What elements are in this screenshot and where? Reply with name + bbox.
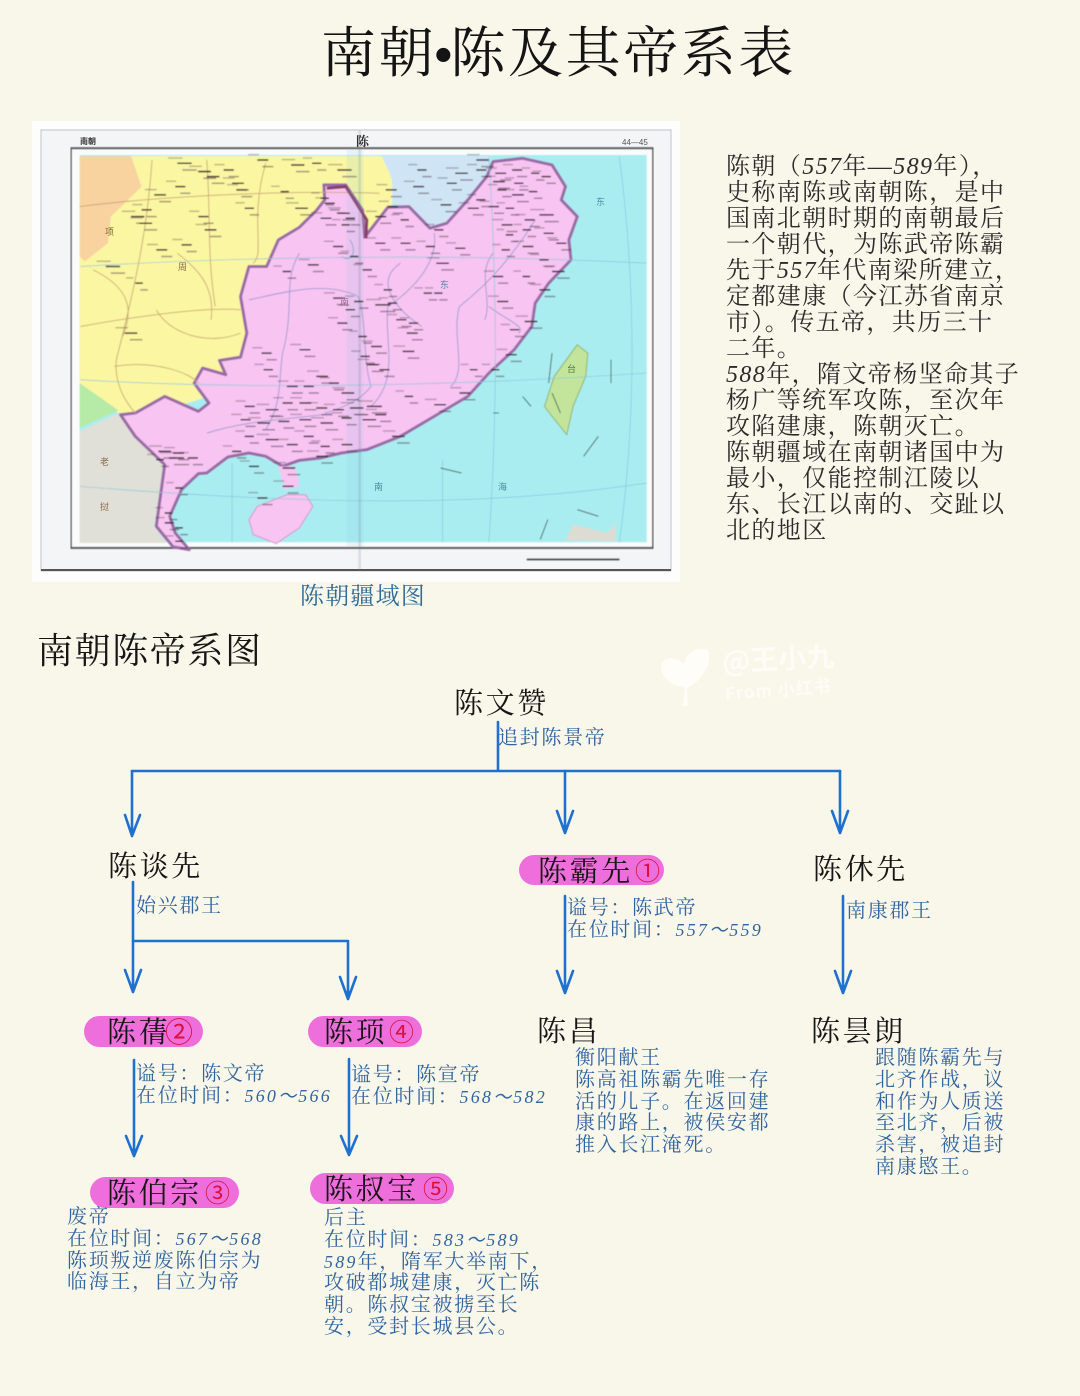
note: 陈文赞: 追封陈景帝 xyxy=(498,727,606,749)
note: 陈叔宝: 安，受封长城县公。 xyxy=(324,1316,519,1338)
map region names: 海 xyxy=(498,480,507,493)
title: 南朝•陈及其帝系表 xyxy=(321,23,796,84)
note: 陈叔宝: 在位时间：583～589 xyxy=(324,1229,520,1251)
map region: Northern Zhou xyxy=(80,156,393,413)
note: 陈伯宗: 废帝 xyxy=(67,1206,110,1228)
arrow: to 陈霸先 xyxy=(557,771,573,833)
note: 陈霸先: 谥号：陈武帝 xyxy=(567,897,697,919)
text block: dynasty introduction: 国南北朝时期的南朝最后 xyxy=(726,206,1005,232)
text block: dynasty introduction: 攻陷建康，陈朝灭亡。 xyxy=(726,414,980,440)
map region: Chen territory xyxy=(121,158,577,550)
map artwork xyxy=(71,130,653,571)
person pill: 陈伯宗: ③ xyxy=(205,1174,233,1210)
section heading: 南朝陈帝系图 xyxy=(37,631,263,671)
map photo page xyxy=(32,121,680,582)
note: 陈霸先: 在位时间：557～559 xyxy=(567,919,763,941)
note: 陈昙朗: 跟随陈霸先与 xyxy=(875,1047,1005,1069)
note: 陈叔宝: 朝。陈叔宝被掳至长 xyxy=(324,1294,519,1316)
note: 陈顼: 在位时间：568～582 xyxy=(351,1086,547,1108)
map region names: 南 xyxy=(340,295,349,308)
watermark heart xyxy=(661,649,709,706)
note: 陈昙朗: 南康愍王。 xyxy=(875,1156,984,1178)
watermark xyxy=(661,635,835,706)
map region names xyxy=(100,195,605,513)
text block: dynasty introduction: 二年。 xyxy=(726,336,802,362)
map region names: 挝 xyxy=(100,500,109,513)
person pill: 陈顼: ④ xyxy=(389,1013,417,1049)
text block: dynasty introduction: 东、长江以南的、交趾以 xyxy=(726,492,1005,518)
note: 陈伯宗: 在位时间：567～568 xyxy=(67,1228,263,1250)
person pill: 陈霸先 xyxy=(519,855,664,885)
text block: dynasty introduction xyxy=(726,153,1020,544)
person pill: 陈霸先: 陈霸先 xyxy=(538,856,633,888)
person pill: 陈蒨: ② xyxy=(165,1011,196,1051)
map region names: 台 xyxy=(567,362,576,375)
note: 陈昙朗: 北齐作战，议 xyxy=(875,1069,1005,1091)
map scale bar xyxy=(527,559,619,561)
note: 陈叔宝 xyxy=(324,1207,553,1338)
map header page number: 44—45 xyxy=(622,138,648,147)
map region names: 东 xyxy=(596,195,605,208)
note: 陈昌: 衡阳献王 xyxy=(575,1047,662,1069)
family tree connectors xyxy=(124,720,852,1158)
map: Chen dynasty territory xyxy=(32,121,680,582)
arrow: to 陈昙朗 xyxy=(835,896,851,993)
map region: Taiwan xyxy=(544,345,588,435)
watermark source: From 小红书 xyxy=(724,672,832,705)
note: 陈叔宝: 589年，隋军大举南下， xyxy=(324,1251,553,1273)
person pill: 陈顼 xyxy=(308,1016,422,1047)
person pill: 陈叔宝: ⑤ xyxy=(423,1170,451,1206)
text block: dynasty introduction: 史称南陈或南朝陈，是中 xyxy=(726,180,1005,206)
note: 陈顼 xyxy=(351,1064,547,1108)
text block: dynasty introduction: 定都建康（今江苏省南京 xyxy=(726,284,1005,310)
map region names: 项 xyxy=(105,225,114,238)
map caption: 陈朝疆域图 xyxy=(300,584,426,610)
note: 陈昌: 推入长江淹死。 xyxy=(575,1134,727,1156)
map region: Indochina xyxy=(80,413,167,543)
text block: dynasty introduction: 陈朝疆域在南朝诸国中为 xyxy=(726,440,1005,466)
text block: dynasty introduction: 先于557年代南梁所建立， xyxy=(726,258,1020,284)
note: 陈伯宗: 陈顼叛逆废陈伯宗为 xyxy=(67,1250,262,1272)
arrow: to 陈叔宝 xyxy=(341,1059,357,1155)
note: 陈蒨 xyxy=(136,1062,332,1107)
map region names: 南 xyxy=(374,480,383,493)
text block: dynasty introduction: 杨广等统军攻陈，至次年 xyxy=(726,388,1005,414)
map region: Northern Qi xyxy=(382,156,491,228)
note: 陈昙朗: 和作为人质送 xyxy=(875,1091,1005,1113)
text block: dynasty introduction: 陈朝（557年—589年）， xyxy=(726,154,998,180)
note: 陈休先: 南康郡王 xyxy=(846,900,933,922)
map region: southwest green xyxy=(80,383,118,428)
arrow: to 陈伯宗 xyxy=(126,1060,142,1156)
note: 陈昙朗: 至北齐，后被 xyxy=(875,1112,1005,1134)
note: 陈叔宝: 后主 xyxy=(324,1207,367,1229)
map region names: 老 xyxy=(100,455,109,468)
arrow: to 陈休先 xyxy=(832,771,848,833)
person: 陈休先: 陈休先 xyxy=(813,854,908,886)
map region: western highland xyxy=(80,156,142,262)
map sea xyxy=(71,148,653,548)
text block: dynasty introduction: 一个朝代，为陈武帝陈霸 xyxy=(726,232,1005,258)
note: 陈霸先 xyxy=(567,896,763,941)
connector and arrow: to 陈顼 xyxy=(133,941,356,999)
arrow: to 陈昌 xyxy=(557,896,573,993)
note: 陈蒨: 在位时间：560～566 xyxy=(136,1085,332,1107)
person pill: 陈叔宝 xyxy=(310,1173,454,1204)
person: 陈昙朗: 陈昙朗 xyxy=(811,1016,906,1048)
note: 陈谈先: 始兴郡王 xyxy=(136,895,223,917)
text block: dynasty introduction: 市）。传五帝，共历三十 xyxy=(726,310,993,336)
note: 陈昌: 活的儿子。在返回建 xyxy=(575,1091,770,1113)
note: 陈昌: 康的路上，被侯安都 xyxy=(575,1112,770,1134)
text block: dynasty introduction: 最小，仅能控制江陵以 xyxy=(726,466,980,492)
note: 陈顼: 谥号：陈宣帝 xyxy=(351,1064,481,1086)
person pill: 陈蒨 xyxy=(84,1016,203,1047)
note: 陈昌: 陈高祖陈霸先唯一存 xyxy=(575,1069,770,1091)
map region names: 东 xyxy=(440,278,449,291)
map city markers xyxy=(106,160,566,541)
note: 陈伯宗 xyxy=(67,1206,263,1293)
person: 陈谈先: 陈谈先 xyxy=(108,851,203,883)
person pill: 陈伯宗 xyxy=(90,1177,239,1208)
map region: Hainan xyxy=(249,495,313,544)
person pill: 陈叔宝: 陈叔宝 xyxy=(324,1174,419,1206)
note: 陈昙朗 xyxy=(875,1047,1005,1178)
connector: root to branches xyxy=(132,722,840,771)
map rivers and grid xyxy=(80,160,379,413)
text block: dynasty introduction: 北的地区 xyxy=(726,518,828,544)
note: 陈昙朗: 杀害，被追封 xyxy=(875,1134,1005,1156)
watermark name: @王小九 xyxy=(721,635,835,681)
map region names: 周 xyxy=(178,260,187,273)
map county labels xyxy=(97,155,557,536)
map region: Luzon xyxy=(566,524,616,541)
map header left label: 南朝 xyxy=(80,136,96,147)
person: 陈昌: 陈昌 xyxy=(537,1016,600,1048)
note: 陈伯宗: 临海王，自立为帝 xyxy=(67,1271,241,1293)
note: 陈蒨: 谥号：陈文帝 xyxy=(136,1063,266,1085)
person pill: 陈顼: 陈顼 xyxy=(324,1017,387,1049)
person pill: 陈伯宗: 陈伯宗 xyxy=(107,1178,202,1210)
arrow: to 陈蒨 xyxy=(125,882,141,992)
text block: dynasty introduction: 588年，隋文帝杨坚命其子 xyxy=(726,362,1020,388)
person: 陈文赞: 陈文赞 xyxy=(454,688,549,720)
note: 陈昌 xyxy=(575,1047,770,1156)
person pill: 陈霸先: ① xyxy=(635,852,663,888)
person pill: 陈蒨: 陈蒨 xyxy=(107,1017,170,1049)
note: 陈叔宝: 攻破都城建康，灭亡陈 xyxy=(324,1272,541,1294)
map minor place labels xyxy=(111,167,571,548)
arrow: to 陈谈先 xyxy=(125,771,140,836)
map header center label: 陈 xyxy=(356,131,370,150)
